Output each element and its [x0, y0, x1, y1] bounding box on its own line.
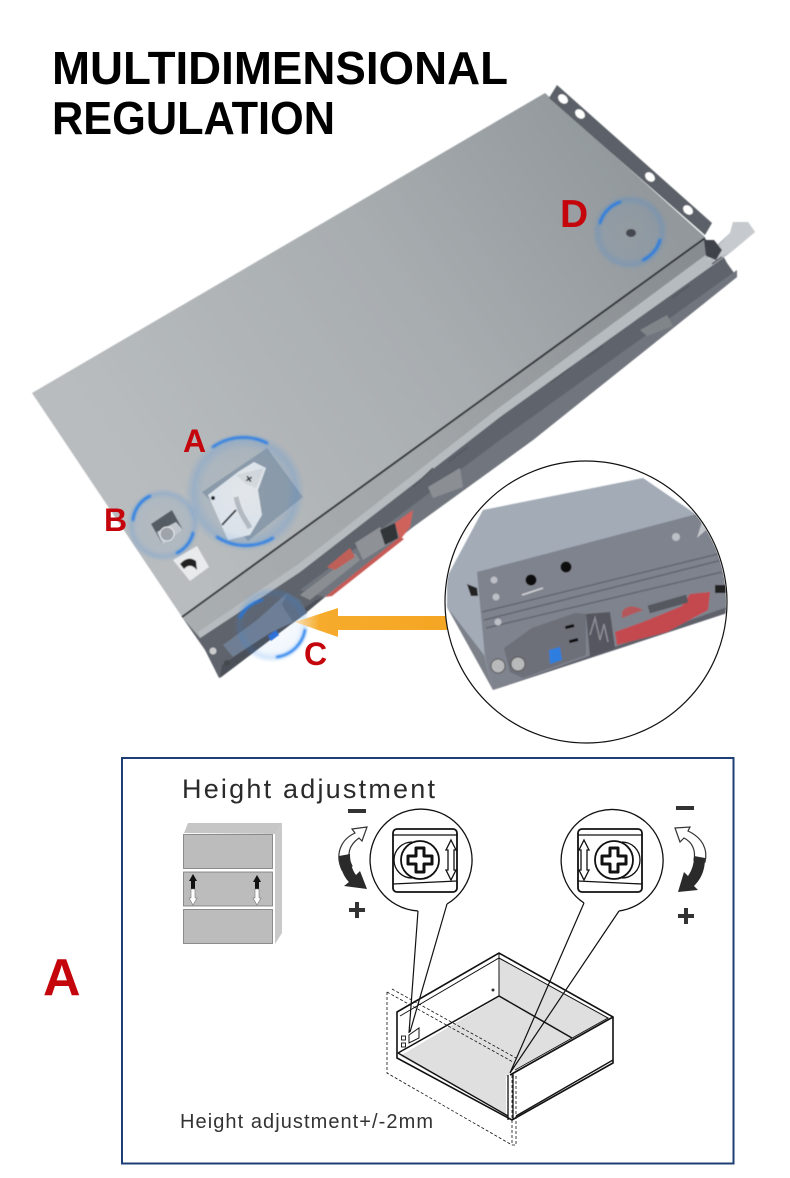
rear bracket with holes	[549, 85, 712, 235]
callout labels A B C D: C	[304, 636, 327, 672]
callout labels A B C D: D	[560, 193, 588, 236]
icon: right rotate arrow with minus and plus	[675, 806, 706, 924]
inset front plate	[477, 514, 730, 690]
inset blue button	[549, 647, 562, 664]
zoom inset circle	[445, 461, 730, 743]
orange arrow	[295, 608, 447, 637]
title	[52, 42, 508, 144]
callout labels A B C D: A	[183, 423, 206, 459]
drawer photo	[32, 85, 755, 678]
dark fold line	[182, 238, 705, 617]
icon: left screw magnifier	[370, 809, 472, 911]
blue glow rings	[126, 194, 668, 663]
caption: Height adjustment+/-2mm	[180, 1111, 433, 1133]
slot below B	[173, 546, 209, 581]
title: MULTIDIMENSIONAL	[52, 42, 508, 94]
panel: height adjustment diagram	[122, 758, 734, 1164]
drawer base panel	[32, 93, 705, 617]
drawer rail and mechanism	[182, 238, 737, 678]
inset holes	[526, 574, 536, 586]
drawer line drawing	[387, 953, 613, 1145]
heading: Height adjustment	[182, 774, 435, 804]
adjustment window B	[151, 510, 183, 545]
magnifier leader lines	[409, 903, 619, 1073]
title: REGULATION	[52, 92, 335, 144]
light rail band	[198, 222, 755, 638]
inset screws	[491, 659, 505, 673]
icon: cabinet with three drawers	[184, 823, 282, 944]
inset connector	[504, 613, 586, 678]
inset red latch	[615, 592, 710, 645]
icon: right screw magnifier	[561, 809, 663, 911]
icon: left rotate arrow with minus and plus	[339, 809, 367, 918]
rear screw D	[626, 229, 636, 237]
inset back panel	[447, 478, 700, 690]
adjustment window A	[202, 448, 303, 541]
connector C	[210, 593, 307, 666]
callout labels A B C D	[104, 193, 588, 672]
callout labels A B C D: B	[104, 502, 127, 538]
section letter A: A	[43, 949, 81, 1007]
drawer side strip	[182, 238, 707, 638]
adjustment window A: +	[242, 470, 256, 487]
icon: up and down arrows	[189, 874, 261, 905]
